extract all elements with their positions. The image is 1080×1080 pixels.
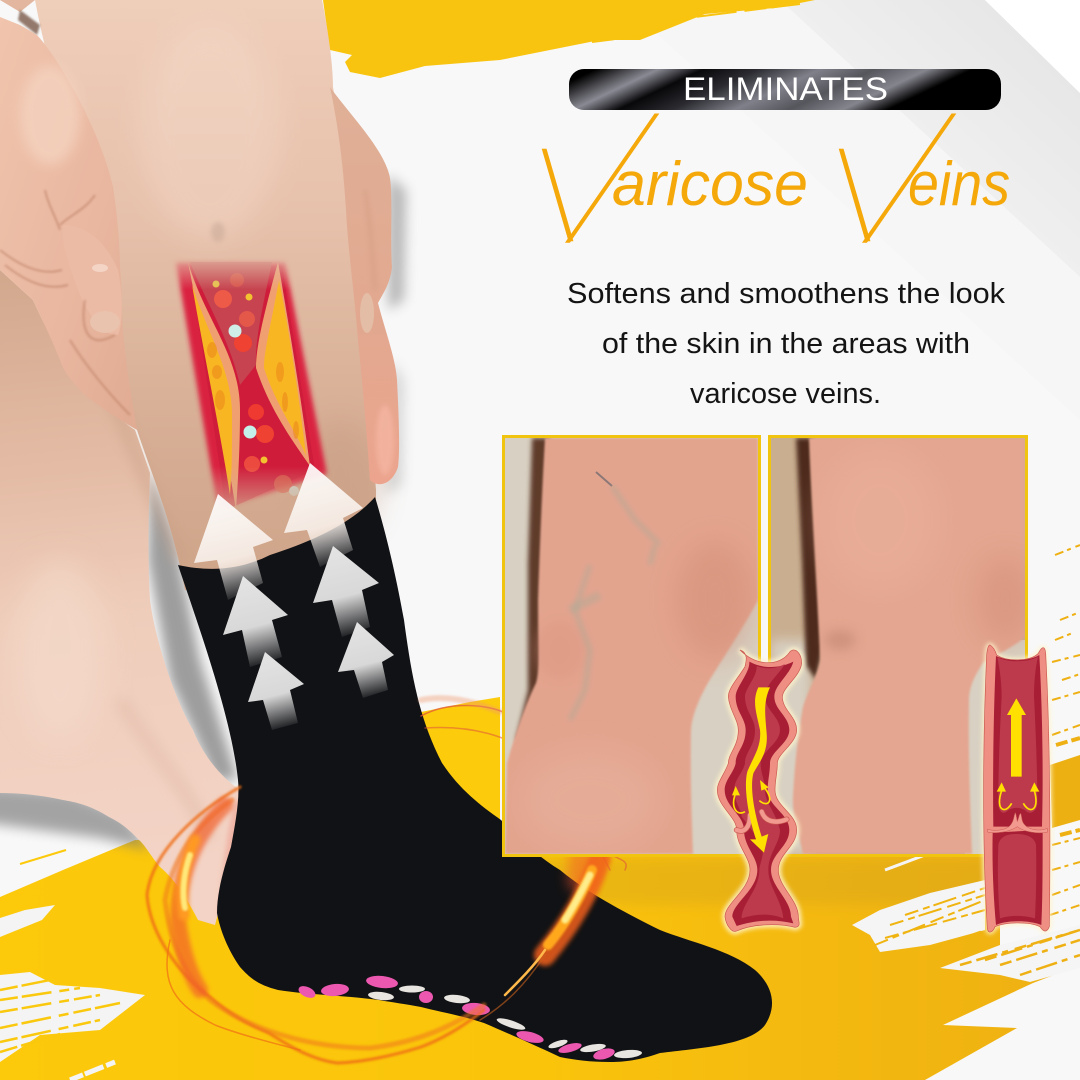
photo panel: before [504, 436, 760, 856]
title: Varicose Veins: eins [908, 150, 1010, 219]
vein diagram: healthy valve [984, 645, 1050, 932]
description text: of the skin in the areas with [602, 328, 970, 360]
title: Varicose Veins: aricose [612, 150, 808, 219]
title: Varicose Veins [538, 83, 1010, 279]
fire ring around the ankle [147, 698, 626, 1063]
banner: Eliminates: ELIMINATES [683, 71, 888, 107]
left hand [0, 0, 137, 430]
arrow 6 [338, 622, 394, 698]
title: Varicose Veins: \ [538, 127, 578, 268]
right hand fingers [330, 87, 399, 484]
back leg and foot [0, 270, 240, 925]
arrow 2 [284, 463, 363, 567]
yellow brush: top [323, 0, 815, 78]
description text: varicose veins. [690, 378, 881, 410]
vein diagram: damaged valve [717, 650, 802, 931]
title: Varicose Veins: \ [835, 127, 875, 268]
grip dots on sole [297, 974, 642, 1062]
white and gold brush streaks [0, 545, 1080, 1080]
yellow brush: bottom [0, 697, 1080, 1080]
title: Varicose Veins: / [840, 83, 975, 279]
arrow 3 [223, 576, 288, 667]
description text [567, 278, 1006, 410]
description text: Softens and smoothens the look [567, 278, 1006, 310]
artery illustration on the leg [176, 262, 327, 510]
arrow 4 [313, 546, 379, 637]
shadow behind legs [0, 175, 406, 850]
title: Varicose Veins: / [543, 83, 678, 279]
photo panel: after [770, 436, 1035, 856]
arrow 1 [194, 494, 273, 600]
banner: Eliminates [569, 69, 1001, 110]
arrow 5 [248, 652, 304, 730]
sock [178, 497, 772, 1062]
calf [35, 0, 380, 590]
